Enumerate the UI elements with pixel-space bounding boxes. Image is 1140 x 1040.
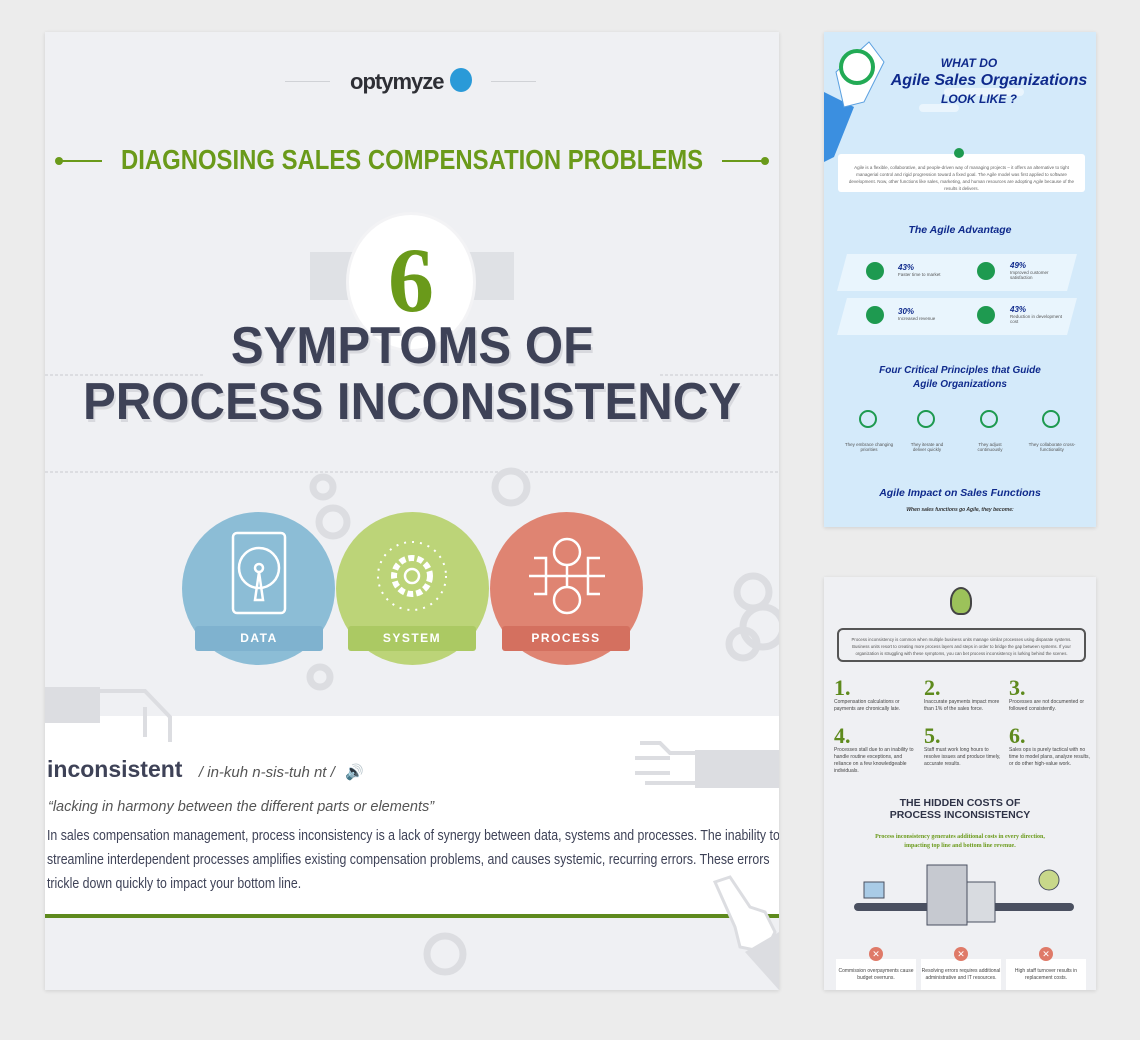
subtitle: DIAGNOSING SALES COMPENSATION PROBLEMS <box>121 144 703 175</box>
heading: what do agile: WHAT DO <box>941 56 997 70</box>
body text <box>47 828 779 892</box>
body text: In sales compensation management, process inconsistency is a lack of synergy between data, systems and processes. The inability to <box>47 828 779 844</box>
circle: system <box>336 512 489 665</box>
circles: data system process <box>182 512 643 665</box>
stat cards: Faster time to market <box>898 272 941 277</box>
quote: “lacking in harmony between the different parts or elements” <box>48 799 434 815</box>
principles icons <box>845 410 1076 452</box>
symptoms list: Sales ops is purely tactical with no time to model plans, analyze results, or do other high-value work. <box>1009 747 1090 767</box>
stat cards: 43% <box>898 263 914 272</box>
symptoms list: 3. <box>1009 675 1026 700</box>
symptoms list: 4. <box>834 723 850 748</box>
symptoms list: 1. <box>834 675 850 700</box>
principles icons: They adjust continuously <box>977 442 1003 452</box>
symptoms list: Processes stall due to an inability to handle routine exceptions, and reliance on a few knowledgeable individuals. <box>834 747 914 774</box>
stat cards: Improved customer <box>1010 270 1049 275</box>
intro box: Agile is a flexible, collaborative, and people-driven way of managing projects – it offers an alternative to tight managerial control and rigid progression toward a fixed goal. The Agile model was first applied to software development. Now, other functions like sales, marketing, and human resources are adopting Agile because of the results it delivers. <box>849 165 1074 191</box>
circle: system: SYSTEM <box>383 631 441 645</box>
cost cards: High staff turnover results in replacement costs. <box>1015 968 1077 981</box>
heading: four principles: Four Critical Principles that Guide <box>879 365 1041 376</box>
circle: data: DATA <box>240 631 278 645</box>
principles icons: They iterate and deliver quickly <box>911 442 943 452</box>
stat cards: Reduction in development <box>1010 314 1062 319</box>
heading: agile advantage: The Agile Advantage <box>908 224 1012 236</box>
title: SYMPTOMS OF <box>231 317 593 375</box>
symptoms list: 2. <box>924 675 940 700</box>
cost cards: ✕ <box>1042 949 1050 959</box>
stat cards: 49% <box>1010 261 1026 270</box>
symptoms list: 5. <box>924 723 940 748</box>
intro box <box>838 154 1085 192</box>
cost cards: Commission overpayments cause budget overruns. <box>838 968 914 981</box>
symptoms list <box>834 675 1090 774</box>
stat cards: Increased revenue <box>898 316 935 321</box>
circle: process: PROCESS <box>531 631 601 645</box>
principles icons: They collaborate cross-functionality <box>1029 442 1075 452</box>
heading: hidden costs <box>890 797 1030 821</box>
heading: four principles <box>879 365 1041 390</box>
intro box <box>837 628 1086 662</box>
circle: process <box>490 512 643 665</box>
stat cards: satisfaction <box>1010 275 1033 280</box>
panel: agile infographic preview: When sales functions go Agile, they become: <box>906 507 1014 513</box>
heading: agile impact: Agile Impact on Sales Functions <box>879 487 1041 499</box>
icon: lightbulb <box>950 587 972 615</box>
green subtitle <box>875 834 1045 849</box>
symptoms list: Processes are not documented or followed consistently. <box>1009 699 1084 712</box>
heading: what do agile: Agile Sales Organizations <box>891 72 1087 89</box>
stat cards: 30% <box>898 307 914 316</box>
panel: agile infographic preview <box>824 32 1096 527</box>
green subtitle: impacting top line and bottom line revenue. <box>904 843 1016 849</box>
panel: main infographic <box>45 32 779 990</box>
green rule <box>45 914 779 918</box>
title <box>83 317 742 431</box>
stat cards <box>837 254 1077 335</box>
badge: number 6: 6 <box>388 229 434 331</box>
principles icons: They embrace changing priorities <box>845 442 893 452</box>
body text: trickle down quickly to impact your bottom line. <box>47 876 301 892</box>
white definition band <box>45 716 779 916</box>
icon: hand left <box>45 687 172 742</box>
stat cards: 43% <box>1010 305 1026 314</box>
decorative clouds <box>944 88 1024 96</box>
heading: hidden costs: PROCESS INCONSISTENCY <box>890 809 1030 821</box>
background gears <box>45 374 779 976</box>
icon: hand with stopwatch <box>824 41 884 162</box>
badge: number 6 <box>310 215 514 349</box>
circle: data <box>182 512 335 665</box>
icon: hand right <box>635 741 779 788</box>
heading: four principles: Agile Organizations <box>913 379 1007 390</box>
panel: symptoms preview <box>824 577 1096 990</box>
cost cards: ✕ <box>872 949 880 959</box>
symptoms list: Inaccurate payments impact more than 1% of the sales force. <box>924 699 999 712</box>
cost cards: Resolving errors requires additional administrative and IT resources. <box>922 968 1000 981</box>
cost cards <box>836 947 1086 990</box>
heading: hidden costs: THE HIDDEN COSTS OF <box>900 797 1020 809</box>
icon: pointing hand <box>713 875 779 990</box>
logo: optymyze <box>350 69 443 94</box>
illustration: machine conveyor <box>854 864 1074 926</box>
green subtitle: Process inconsistency generates additional costs in every direction, <box>875 834 1045 840</box>
symptoms list: 6. <box>1009 723 1026 748</box>
heading: what do agile <box>890 56 1087 106</box>
heading: what do agile: LOOK LIKE ? <box>941 92 1017 106</box>
symptoms list: Compensation calculations or payments are chronically late. <box>834 699 900 712</box>
intro box: Process inconsistency is common when multiple business units manage similar processes using disparate systems. Business units resort to creating more process layers and steps in order to bridge the gap between systems. If your organization is struggling with these symptoms, you can bet process inconsistency is lurking behind the scenes. <box>852 637 1071 656</box>
body text: streamline interdependent processes amplifies existing compensation problems, and causes systemic, recurring errors. These errors <box>47 852 769 868</box>
stat cards: cost <box>1010 319 1018 324</box>
title: PROCESS INCONSISTENCY <box>83 373 741 431</box>
logo <box>285 68 536 94</box>
cost cards: ✕ <box>957 949 965 959</box>
symptoms list: Staff must work long hours to resolve issues and produce timely, accurate results. <box>924 747 1000 767</box>
word heading: inconsistent / in-kuh n-sis-tuh nt / 🔊 <box>47 756 364 782</box>
